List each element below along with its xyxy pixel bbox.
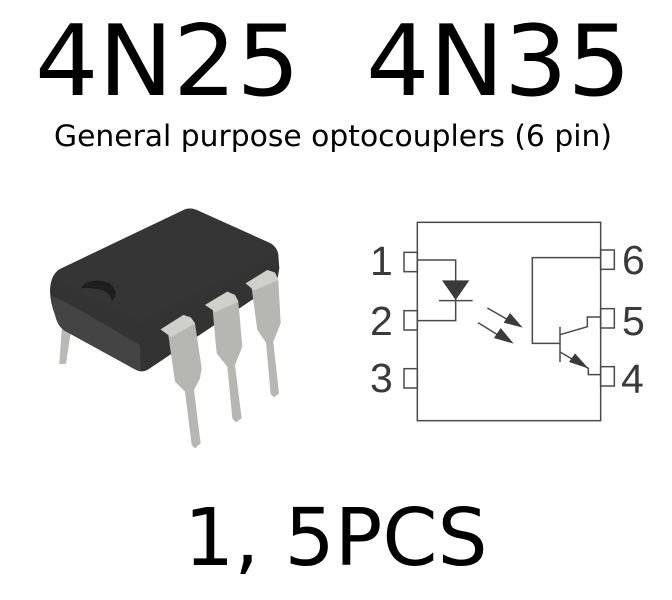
pin number labels: 6 [622,237,645,283]
phototransistor symbol [532,258,601,375]
package outline [417,222,601,421]
rear left pin [59,329,71,364]
pin number labels: 5 [622,298,645,344]
quantity label: 1, 5PCS [184,492,488,584]
light arrows [478,308,523,344]
pinout schematic [404,222,614,421]
pin pads [404,250,614,388]
icon: 6-pin DIP optocoupler chip [50,208,281,448]
LED symbol [417,260,473,321]
pin: middle [205,292,242,422]
pin number labels [370,237,645,402]
pin number labels: 2 [370,298,393,344]
chip body silhouette [50,208,279,371]
chip top face [53,208,278,322]
pin number labels: 4 [621,356,644,402]
pin: front [161,315,202,448]
subtitle: General purpose optocouplers (6 pin) [54,119,612,153]
title: 4N25: 4N25 [35,5,300,119]
title: 4N35: 4N35 [366,5,631,119]
pin number labels: 3 [370,355,393,401]
pin: rear [246,270,281,397]
pin number labels: 1 [370,238,393,284]
chip lower side band [52,296,141,371]
pin-1 notch [81,281,116,301]
